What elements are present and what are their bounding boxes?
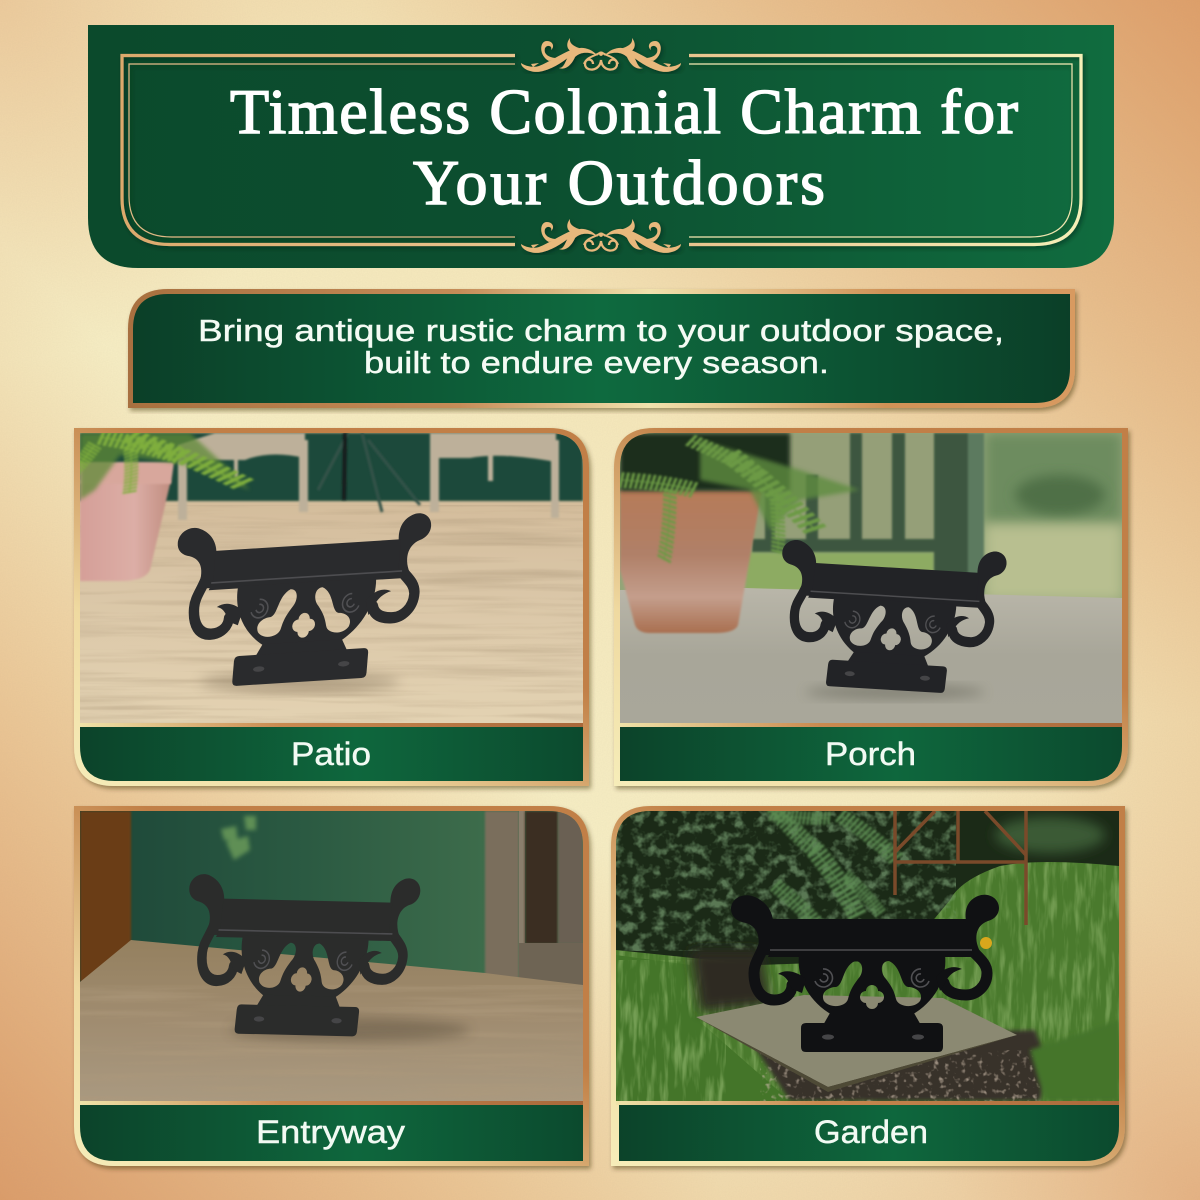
ornament: top flourish bbox=[521, 38, 681, 72]
icon: boot scraper in garden bbox=[731, 895, 999, 1052]
panel: garden bbox=[611, 795, 1125, 1166]
label: garden: Garden bbox=[814, 1114, 928, 1150]
title: Your Outdoors bbox=[413, 147, 825, 218]
gold double frame bbox=[122, 56, 1081, 244]
icon: boot scraper in entryway bbox=[174, 873, 422, 1038]
photo: porch with boot scraper bbox=[620, 433, 1122, 723]
icon: boot scraper on porch bbox=[767, 539, 1008, 696]
title: Timeless Colonial Charm for bbox=[230, 76, 1018, 147]
panel frame bbox=[74, 806, 589, 1166]
header banner bbox=[88, 25, 1114, 268]
subtitle text bbox=[198, 313, 1004, 380]
panel: entryway bbox=[74, 806, 589, 1166]
subtitle banner bbox=[128, 289, 1075, 408]
photo: garden with boot scraper bbox=[616, 795, 1119, 1101]
photo: patio deck with boot scraper bbox=[60, 429, 583, 723]
label: entryway: Entryway bbox=[256, 1114, 405, 1150]
subtitle panel bbox=[133, 294, 1070, 403]
subtitle text: Bring antique rustic charm to your outdoor space, bbox=[198, 313, 1004, 348]
ornament: bottom flourish bbox=[521, 219, 681, 253]
panel: patio bbox=[60, 428, 589, 786]
title bbox=[230, 76, 1018, 218]
label: porch bbox=[620, 723, 1122, 781]
label: patio bbox=[80, 723, 583, 781]
subtitle border bbox=[128, 289, 1075, 408]
label: entryway bbox=[80, 1101, 583, 1161]
panel frame bbox=[614, 428, 1128, 786]
panel frame bbox=[74, 428, 589, 786]
icon: boot scraper on patio bbox=[166, 512, 432, 690]
label: garden bbox=[616, 1101, 1119, 1161]
banner panel bbox=[88, 25, 1114, 268]
label: patio: Patio bbox=[291, 736, 371, 772]
label: porch: Porch bbox=[825, 736, 916, 772]
panel: porch bbox=[614, 428, 1128, 786]
panel frame bbox=[611, 806, 1125, 1166]
photo: entryway with boot scraper bbox=[80, 811, 583, 1101]
subtitle text: built to endure every season. bbox=[364, 345, 829, 380]
